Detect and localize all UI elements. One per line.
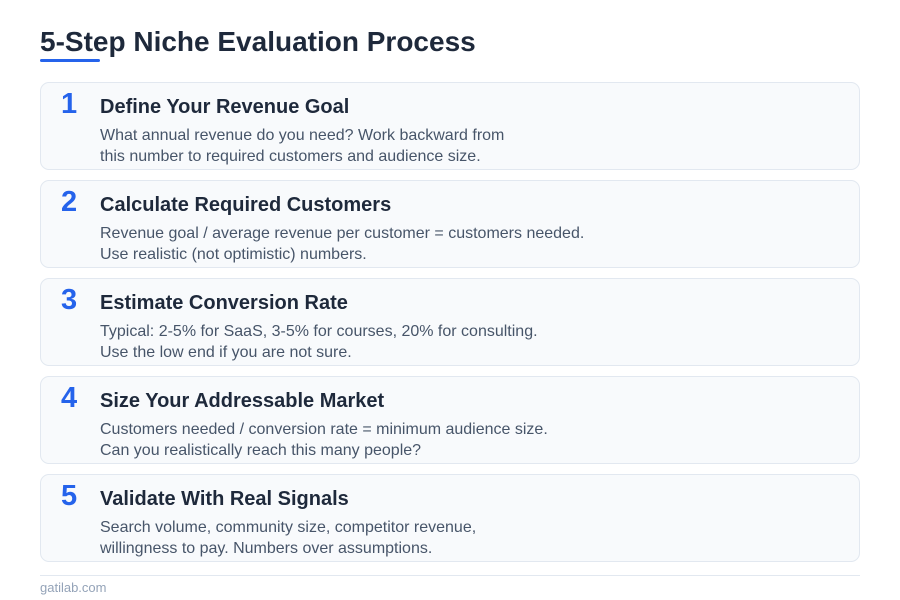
number 3: 3 — [61, 284, 77, 316]
text 5 — [100, 519, 476, 557]
card: step 2 — [40, 180, 860, 268]
title underline — [40, 59, 100, 62]
heading 3: Estimate Conversion Rate — [100, 292, 348, 314]
card: step 1 — [40, 82, 860, 170]
number 5: 5 — [61, 480, 77, 512]
text 1 — [100, 127, 504, 165]
text 2: Use realistic (not optimistic) numbers. — [100, 246, 367, 263]
footer: gatilab.com — [40, 580, 106, 595]
number 4: 4 — [61, 382, 77, 414]
heading 4: Size Your Addressable Market — [100, 390, 384, 412]
card: step 4 — [40, 376, 860, 464]
text 3: Use the low end if you are not sure. — [100, 344, 352, 361]
text 3: Typical: 2-5% for SaaS, 3-5% for courses, 20% for consulting. — [100, 323, 538, 340]
number 2: 2 — [61, 186, 77, 218]
heading 2: Calculate Required Customers — [100, 194, 391, 216]
text 5: willingness to pay. Numbers over assumptions. — [100, 540, 432, 557]
heading 1: Define Your Revenue Goal — [100, 96, 349, 118]
text 1: this number to required customers and audience size. — [100, 148, 481, 165]
text 4 — [100, 421, 548, 459]
text 2 — [100, 225, 584, 263]
text 4: Can you realistically reach this many people? — [100, 442, 421, 459]
text 4: Customers needed / conversion rate = minimum audience size. — [100, 421, 548, 438]
text 3 — [100, 323, 538, 361]
text 2: Revenue goal / average revenue per customer = customers needed. — [100, 225, 584, 242]
text 1: What annual revenue do you need? Work backward from — [100, 127, 504, 144]
card: step 5 — [40, 474, 860, 562]
number 1: 1 — [61, 88, 77, 120]
card: step 3 — [40, 278, 860, 366]
title: 5-Step Niche Evaluation Process — [40, 26, 476, 57]
text 5: Search volume, community size, competitor revenue, — [100, 519, 476, 536]
heading 5: Validate With Real Signals — [100, 488, 349, 510]
